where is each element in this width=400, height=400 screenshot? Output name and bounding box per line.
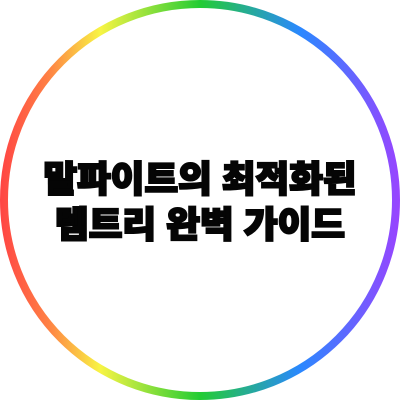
title line 2: 템트리 완벽 가이드 [55, 204, 345, 245]
title [44, 158, 356, 245]
title line 1: 말파이트의 최적화된 [44, 158, 356, 200]
